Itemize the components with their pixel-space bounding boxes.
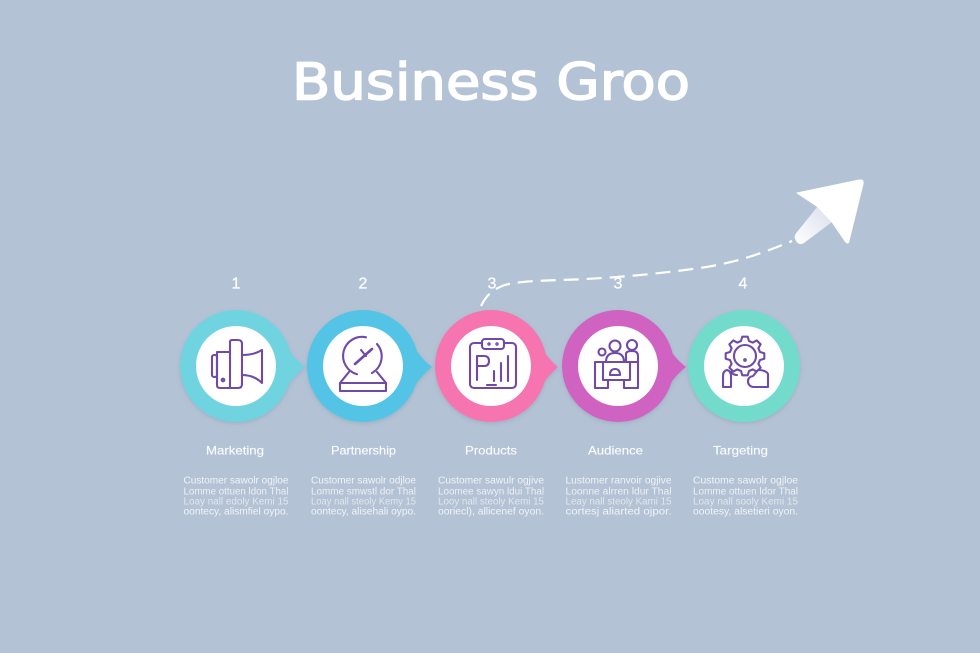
text block: marketing: Customer sawolr ogjloe (184, 476, 289, 486)
text block: audience: Loonne alrren ldur Thal (566, 486, 672, 498)
icon: megaphone (212, 340, 262, 388)
text block: marketing: oontecy, alismfiel oypo. (184, 506, 288, 518)
text block: products: Looy nall steoly Kemi 15 (438, 496, 544, 508)
text block: audience: Lustomer ranvoir ogjive (566, 476, 672, 486)
icon: clipboard chart (470, 339, 516, 388)
step 2 badge: partnership (307, 310, 432, 422)
text block: marketing: Lomme ottuen ldon Thal (184, 486, 288, 498)
text block: audience: cortesj aliarted ojpor. (566, 506, 672, 518)
step numbers: 1 (232, 276, 241, 292)
labels: Targeting (713, 444, 768, 458)
text block: targeting: Custome sawolr ogjloe (693, 476, 798, 486)
text block: partnership: Loay nall steoly Kemy 15 (311, 496, 416, 508)
text block: partnership: Customer sawolr odjloe (311, 476, 416, 486)
text block: targeting: Loay nall sooly Kemi 15 (693, 496, 798, 508)
text block: marketing: Loay nall edoly Kemi 15 (184, 496, 289, 508)
step 5 badge: targeting (688, 310, 800, 422)
step numbers: 3 (614, 276, 623, 292)
labels: Products (465, 444, 517, 458)
step numbers (232, 276, 748, 292)
icon: globe on stand (340, 337, 386, 391)
step 4 badge: audience (562, 310, 686, 422)
text block: targeting (693, 476, 798, 518)
text block: audience: Leay nall steoly Kami 15 (566, 496, 672, 508)
step numbers: 3 (488, 276, 497, 292)
step 3 badge: products (435, 310, 558, 422)
text block: partnership: oontecy, alisehali oypo. (311, 506, 416, 518)
arrow (795, 180, 863, 244)
text block: products (438, 476, 544, 518)
text block: partnership: Lomme smwstl dor Thal (311, 486, 416, 498)
text block: targeting: oootesy, alsetieri oyon. (693, 506, 798, 518)
text block: products: Customer sawulr ogjive (438, 476, 544, 486)
labels: Audience (588, 444, 643, 458)
text block: marketing (184, 476, 289, 518)
title: Business Groo (292, 54, 690, 112)
step 1 badge: marketing (180, 310, 305, 422)
text block: partnership (311, 476, 416, 518)
text block: targeting: Lomme ottuen ldor Thal (693, 486, 798, 498)
text block: audience (566, 476, 672, 518)
icon: gear with hands (723, 337, 768, 387)
labels: Marketing (206, 444, 264, 458)
text block: products: Loomee sawyn ldui Thal (438, 486, 544, 498)
icon: people at a desk (595, 340, 638, 388)
labels: Partnership (331, 444, 396, 458)
labels (206, 444, 768, 458)
dashed growth path (481, 241, 792, 306)
step numbers: 4 (739, 276, 748, 292)
step numbers: 2 (359, 276, 368, 292)
text block: products: ooriecl), allicenef oyon. (438, 506, 544, 518)
